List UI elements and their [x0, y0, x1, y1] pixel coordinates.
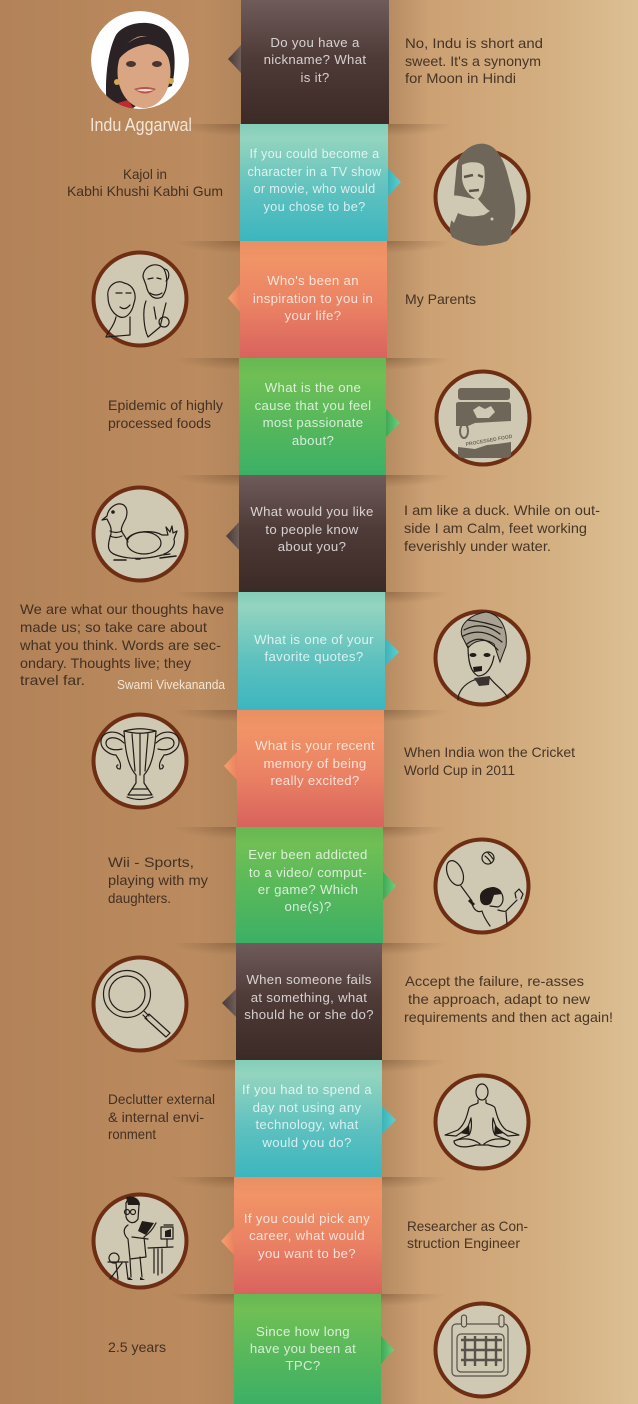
panel: row 8 video game	[108, 827, 528, 943]
question text: inspiration to you in	[253, 291, 373, 306]
question text: you want to be?	[258, 1246, 356, 1261]
question text: What is one of your	[254, 632, 374, 647]
panel: row 3 inspiration	[94, 241, 476, 358]
answer text: travel far.	[20, 672, 85, 688]
icon: duck	[94, 488, 186, 580]
question text: When someone fails	[246, 972, 372, 987]
question text: career, what would	[249, 1228, 365, 1243]
question text: cause that you feel	[255, 398, 371, 413]
question text: favorite quotes?	[265, 649, 363, 664]
arrow	[388, 168, 401, 196]
answer text	[407, 1218, 528, 1251]
arrow	[228, 284, 240, 312]
answer text: World Cup in 2011	[404, 762, 515, 778]
question text	[244, 1211, 370, 1261]
arrow	[222, 989, 236, 1017]
icon: calendar	[436, 1304, 528, 1396]
name label: Indu Aggarwal	[90, 115, 192, 135]
question text: technology, what	[255, 1117, 359, 1132]
question text: Since how long	[256, 1324, 350, 1339]
icon: Kajol silhouette	[436, 144, 528, 245]
arrow	[224, 752, 237, 780]
question text: memory of being	[263, 756, 367, 771]
arrow	[385, 638, 399, 666]
answer text	[108, 1091, 215, 1142]
question text: to a video/ comput-	[249, 865, 367, 880]
panel: row 5 about you	[94, 475, 600, 592]
question text: or movie, who would	[254, 181, 376, 196]
answer text	[404, 973, 613, 1025]
arrow	[381, 1336, 394, 1364]
question text: about you?	[278, 539, 346, 554]
question text: at something, what	[251, 990, 367, 1005]
question band	[234, 1294, 381, 1404]
answer text	[404, 744, 575, 778]
question text: Who's been an	[267, 273, 359, 288]
answer text: Kajol in	[123, 166, 167, 182]
answer text: I am like a duck. While on out-	[404, 502, 600, 518]
question text	[254, 632, 374, 664]
question text: nickname? What	[264, 52, 366, 67]
question text	[248, 847, 368, 914]
answer text	[404, 502, 600, 554]
arrow	[221, 1227, 234, 1255]
panel: row 1 nickname	[90, 0, 543, 135]
quote attribution: Swami Vivekananda	[117, 678, 225, 692]
answer text: Kabhi Khushi Kabhi Gum	[67, 183, 223, 199]
question text	[250, 504, 374, 554]
question band	[240, 241, 387, 358]
panel: row 2 character	[67, 124, 528, 245]
answer text: what you think. Words are sec-	[19, 637, 221, 653]
answer text: struction Engineer	[407, 1235, 520, 1251]
question text	[248, 146, 382, 214]
panel: row 7 memory	[94, 710, 575, 827]
arrow	[226, 522, 239, 550]
answer text: ondary. Thoughts live; they	[20, 655, 191, 671]
question band	[236, 827, 383, 943]
question text: really excited?	[270, 773, 360, 788]
question text: What is the one	[265, 380, 361, 395]
answer text: sweet. It's a synonym	[405, 53, 541, 69]
answer text: processed foods	[108, 415, 211, 431]
question band	[239, 358, 386, 475]
arrow	[386, 409, 400, 437]
answer text: When India won the Cricket	[404, 744, 575, 760]
answer text	[19, 601, 224, 688]
answer text: for Moon in Hindi	[405, 70, 516, 86]
panel: row 12 tenure	[108, 1294, 528, 1404]
panel: row 11 career	[94, 1177, 528, 1294]
question text	[244, 972, 374, 1022]
question text: you chose to be?	[264, 199, 366, 214]
answer text: We are what our thoughts have	[20, 601, 224, 617]
question band	[240, 124, 388, 241]
question text: If you had to spend a	[242, 1082, 372, 1097]
question band	[241, 0, 389, 124]
question band	[236, 943, 382, 1060]
answer text	[67, 166, 223, 199]
icon: trophy	[94, 714, 186, 808]
question text	[250, 1324, 356, 1373]
panel: row 6 quotes	[19, 592, 528, 710]
answer text: Wii - Sports,	[108, 854, 194, 870]
answer text: Accept the failure, re-asses	[405, 973, 584, 989]
question text: about?	[292, 433, 334, 448]
answer text: Researcher as Con-	[407, 1218, 528, 1234]
question text	[255, 738, 375, 788]
answer text	[108, 854, 208, 906]
answer text: playing with my	[108, 872, 208, 888]
icon: portrait photo	[91, 11, 189, 114]
icon: processed food jar: PROCESSED FOOD	[465, 434, 513, 448]
icon: magnifying glass	[94, 958, 186, 1050]
answer text: No, Indu is short and	[405, 35, 543, 51]
question text: er game? Which	[258, 882, 358, 897]
answer text	[108, 397, 223, 431]
arrow	[382, 1106, 396, 1134]
question text	[242, 1082, 372, 1150]
question band	[235, 1060, 382, 1177]
answer text: daughters.	[108, 890, 171, 906]
question text: TPC?	[286, 1358, 320, 1373]
answer text	[405, 35, 543, 86]
icon: parents sketch	[94, 252, 186, 346]
answer text: 2.5 years	[108, 1339, 166, 1355]
question text: character in a TV show	[248, 164, 382, 179]
panel: row 10 no technology	[108, 1060, 528, 1177]
question text: Ever been addicted	[248, 847, 368, 862]
answer text: My Parents	[405, 291, 476, 307]
icon: processed food jar	[436, 372, 530, 464]
answer text: the approach, adapt to new	[408, 991, 591, 1007]
question text: most passionate	[263, 415, 363, 430]
question text	[255, 380, 371, 448]
question text: your life?	[285, 308, 341, 323]
icon: badminton player	[436, 840, 528, 932]
question text: to people know	[265, 522, 359, 537]
answer text: made us; so take care about	[20, 619, 207, 635]
question text: one(s)?	[285, 899, 331, 914]
answer text: side I am Calm, feet working	[404, 520, 587, 536]
question text: should he or she do?	[244, 1007, 374, 1022]
arrow	[383, 872, 396, 900]
question text: have you been at	[250, 1341, 356, 1356]
answer text: ronment	[108, 1126, 156, 1142]
question text	[253, 273, 373, 323]
answer text: requirements and then act again!	[404, 1009, 613, 1025]
question text: What is your recent	[255, 738, 375, 753]
question text: Do you have a	[270, 35, 360, 50]
panel: row 4 cause	[108, 358, 530, 475]
question text: day not using any	[253, 1100, 361, 1115]
question text: If you could pick any	[244, 1211, 370, 1226]
answer text: Declutter external	[108, 1091, 215, 1107]
question text	[264, 35, 366, 85]
answer text: & internal envi-	[108, 1109, 204, 1125]
answer text: feverishly under water.	[404, 538, 551, 554]
question band	[237, 710, 384, 827]
question text: is it?	[300, 70, 330, 85]
question band	[234, 1177, 382, 1294]
icon: Swami Vivekananda sketch	[436, 612, 528, 704]
question band	[239, 475, 386, 592]
arrow	[228, 45, 241, 73]
question text: would you do?	[261, 1135, 352, 1150]
icon: meditation	[436, 1076, 528, 1168]
question band	[238, 592, 385, 710]
icon: engineer sketch	[94, 1194, 186, 1288]
question text: What would you like	[250, 504, 374, 519]
answer text: Epidemic of highly	[108, 397, 223, 413]
panel: row 9 failure	[94, 943, 613, 1060]
question text: If you could become a	[250, 146, 380, 161]
